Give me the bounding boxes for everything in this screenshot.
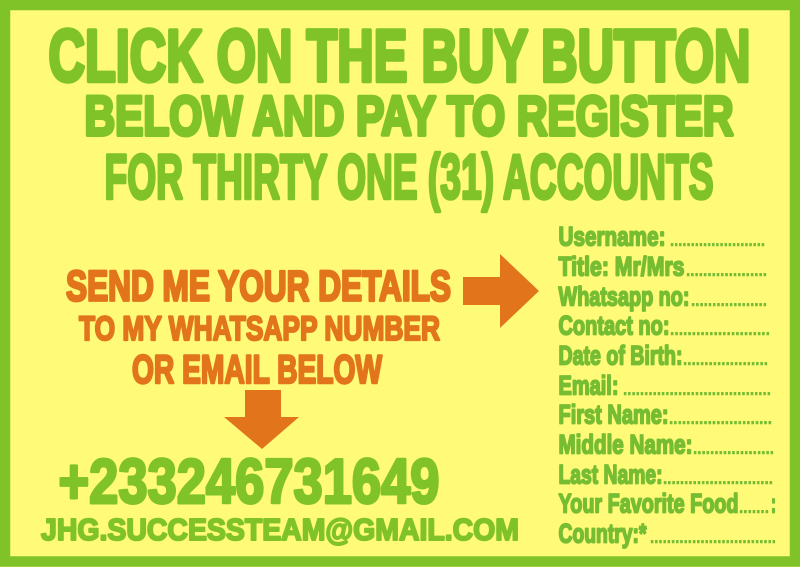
field: username: Username: (558, 222, 666, 252)
field: contact: ....................... (670, 319, 770, 339)
field: title: ................... (686, 260, 767, 280)
field: first name (558, 400, 772, 430)
field: date of birth: .................... (683, 349, 768, 369)
field: favorite food: ....... (739, 497, 769, 517)
field: country: .............................. (650, 527, 776, 547)
field: whatsapp: Whatsapp no: (558, 282, 690, 312)
field: email (558, 370, 771, 400)
arrow: right to form (463, 254, 539, 328)
field: last name (558, 460, 773, 490)
field: favorite food: : (771, 488, 776, 518)
field: contact: Contact no: (558, 310, 670, 340)
field: favorite food: Your Favorite Food (558, 488, 738, 518)
instruction line 3: OR EMAIL BELOW (132, 348, 382, 392)
field: username (558, 222, 765, 252)
field: whatsapp: .................. (691, 290, 767, 310)
field: title: Title: Mr/Mrs (558, 252, 684, 282)
field: first name: First Name: (558, 400, 668, 430)
instruction line 2: TO MY WHATSAPP NUMBER (79, 310, 440, 348)
field: country: Country:* (558, 518, 647, 548)
field: country (558, 518, 776, 548)
field: email: ................................... (623, 379, 771, 399)
registration form fields (558, 222, 776, 548)
arrow: down to contact (224, 390, 299, 449)
field: date of birth: Date of Birth: (558, 340, 682, 370)
field: last name: Last Name: (558, 460, 662, 490)
field: middle name: ................... (693, 438, 774, 458)
field: first name: ........................ (669, 408, 772, 428)
field: email: Email: (558, 370, 618, 400)
instruction text (66, 262, 451, 392)
phone number: +233246731649 (58, 447, 440, 517)
field: last name: .......................... (663, 468, 773, 488)
email address: JHG.SUCCESSTEAM@GMAIL.COM (41, 512, 519, 547)
field: middle name: Middle Name: (558, 430, 692, 460)
field: username: ....................... (670, 230, 765, 250)
instruction line 1: SEND ME YOUR DETAILS (66, 262, 451, 310)
